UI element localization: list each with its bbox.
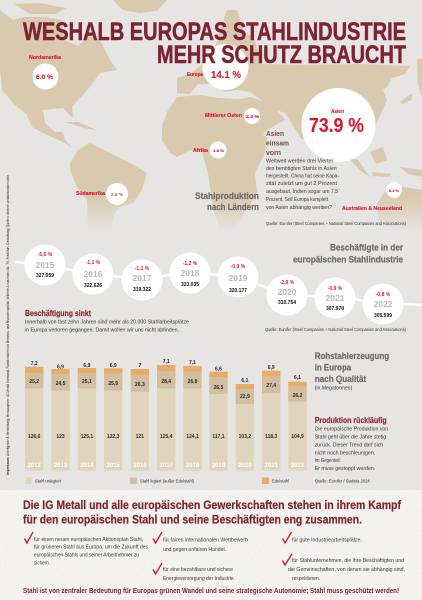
node 2017: -1,1 % bbox=[135, 266, 150, 272]
demand: Stahlunternehmen bbox=[282, 554, 405, 582]
node 2019: -0,9 % bbox=[231, 264, 246, 270]
world map bbox=[0, 0, 422, 232]
bar 2013 bbox=[51, 364, 70, 471]
demand: Wettbewerb: und gegen unfairen Handel. bbox=[163, 547, 226, 553]
text block: Asien einsam vorn: Prozent. Soll Europa komplett bbox=[266, 197, 328, 203]
bar 2014: 2014 bbox=[80, 463, 94, 469]
bar 2012: 126,6 bbox=[28, 434, 41, 440]
demand: Stahlunternehmen: für Stahlunternehmen, die ihre Beschäftigten und bbox=[292, 558, 404, 564]
heading: Beschäftigte: europäischen Stahlindustrie bbox=[293, 255, 403, 265]
node 2021: 2021 bbox=[326, 293, 345, 303]
node 2015 bbox=[24, 244, 66, 286]
bar 2013: 6,9 bbox=[57, 364, 64, 370]
node 2022: 2022 bbox=[374, 299, 393, 309]
panel heading bbox=[23, 498, 402, 526]
text block: Asien einsam vorn: des benötigten Stahls in Asien bbox=[266, 166, 337, 172]
bar 2018: 2018 bbox=[186, 463, 200, 469]
bar 2021: 6,9 bbox=[268, 365, 275, 371]
text block: Produktion rückläufig: Die europäische Produktion von bbox=[315, 426, 388, 432]
demand: Aktionsplan: sichern. bbox=[34, 560, 50, 566]
region: Asien bbox=[302, 88, 376, 162]
chart legend: Quelle: Eurofer / Statista 2024 bbox=[315, 478, 370, 484]
bar 2019: 6,6 bbox=[215, 367, 222, 373]
bar 2014: 25,1 bbox=[82, 379, 92, 385]
bar 2021: 27,4 bbox=[266, 383, 276, 389]
bar 2018: 26,8 bbox=[188, 379, 198, 385]
chart legend: Stahl legiert (außer Edelstahl) bbox=[140, 478, 194, 484]
employment timeline line bbox=[15, 262, 422, 305]
demand: Energieversorgung: Energieversorgung der Industrie. bbox=[163, 576, 235, 582]
text block: Beschäftigung sinkt bbox=[25, 309, 189, 334]
node 2018 bbox=[170, 252, 210, 294]
region: Mittlerer Osten: 2.4 % bbox=[246, 114, 259, 119]
text block: Produktion rückläufig: zurück. Dieser Trend darf sich bbox=[315, 443, 383, 449]
title bbox=[23, 18, 406, 69]
bar 2020: 22,9 bbox=[240, 394, 250, 400]
bar 2015: 6,9 bbox=[110, 363, 117, 369]
node 2020: 2020 bbox=[278, 287, 297, 297]
text block: Produktion rückläufig: Er muss gestoppt werden. bbox=[315, 466, 376, 472]
bar 2019 bbox=[209, 367, 228, 471]
bar 2019: 26,5 bbox=[214, 385, 224, 391]
bar 2015 bbox=[104, 363, 122, 471]
region: Südamerika: 2.5 % bbox=[111, 192, 124, 198]
region: Europa labels bbox=[187, 69, 242, 81]
node 2019: 2019 bbox=[229, 273, 248, 283]
bar 2014 bbox=[78, 363, 96, 471]
node 2016: 322.626 bbox=[84, 283, 102, 289]
bar 2020: 6,1 bbox=[241, 378, 249, 384]
region: Nordamerika: 6.0 % bbox=[36, 74, 53, 81]
bar 2016: 121 bbox=[136, 434, 144, 440]
bar 2013: 123 bbox=[56, 434, 65, 440]
bar 2015: 2015 bbox=[107, 463, 121, 469]
region: Afrika bbox=[193, 142, 226, 158]
demand: Industriearbeitsplätze: für gute Industriearbeitsplätze. bbox=[292, 538, 362, 544]
demand: Aktionsplan: für einen neuen europäischen Aktionsplan Stahl, bbox=[34, 537, 143, 543]
node 2016: 2016 bbox=[84, 269, 103, 279]
region: Australien und Neuseeland bbox=[342, 182, 402, 212]
bar 2017: 28,4 bbox=[161, 379, 171, 385]
bar 2013: 24,5 bbox=[56, 381, 66, 387]
node 2018: 323.035 bbox=[181, 282, 199, 288]
heading: Rohstahlerzeugung: (in Megatonnen) bbox=[315, 386, 352, 392]
bar 2016 bbox=[131, 363, 149, 471]
bar 2019: 2019 bbox=[212, 463, 226, 469]
text block: Asien einsam vorn: Asien bbox=[266, 129, 284, 138]
node 2021: 307.978 bbox=[326, 306, 344, 312]
text block: Asien einsam vorn: hergestellt. China hat seine Kapa- bbox=[266, 174, 339, 180]
bar 2021: 2021 bbox=[265, 463, 279, 469]
demand: Wettbewerb: für fairen internationalen Wettbewerb bbox=[163, 538, 248, 544]
region: Nordamerika: Nordamerika bbox=[29, 55, 61, 61]
heading: Rohstahlerzeugung bbox=[315, 351, 389, 392]
bar 2014: 6,9 bbox=[83, 363, 91, 369]
source: employment: Quelle: Eurofer (Steel Companies + National Steel Companies and Associations) bbox=[265, 327, 407, 332]
heading: Rohstahlerzeugung: in Europa bbox=[315, 363, 352, 373]
bar 2022: 104,9 bbox=[291, 434, 304, 440]
panel: demands bbox=[0, 490, 422, 600]
region: Südamerika bbox=[76, 183, 128, 205]
bar 2022: 26,2 bbox=[293, 393, 303, 399]
circle: Europa bbox=[202, 44, 248, 90]
bar 2018: 124,1 bbox=[186, 434, 199, 440]
demand: Industriearbeitsplätze bbox=[282, 532, 362, 544]
region: Nordamerika bbox=[29, 55, 61, 90]
text block: Produktion rückläufig bbox=[315, 416, 388, 472]
heading: Stahlproduktion nach Ländern: nach Ländern bbox=[207, 202, 259, 212]
node 2015: 2015 bbox=[36, 260, 55, 270]
region: Südamerika: Südamerika bbox=[76, 191, 105, 197]
heading: Rohstahlerzeugung: Rohstahlerzeugung bbox=[315, 351, 389, 361]
imprint: Impressum: Arbeitgeber & Herstellung: Herausgeber: IG Metall Vorstand, Funktionsbereich Betriebs- und Branchenpolitik, Wilhelm-Leuschner-Str. 79, Frankfurt, Gestaltung; Quellen: diverse produktionsberichte bbox=[6, 175, 10, 475]
bar 2017: 2017 bbox=[160, 463, 174, 469]
node 2020: -2,9 % bbox=[280, 280, 295, 286]
text block: Asien einsam vorn: ausgebaut, Indien sogar um 7,5 bbox=[266, 189, 338, 195]
stacked bar chart bbox=[25, 359, 307, 471]
node 2017: 319.322 bbox=[133, 287, 151, 293]
node 2016: -1,1 % bbox=[86, 260, 101, 266]
node 2022: -0,8 % bbox=[376, 292, 391, 298]
region: Australien und Neuseeland: 6.4 % bbox=[389, 188, 399, 193]
demand: Energieversorgung: für eine bezahlbare und sichere bbox=[163, 567, 233, 573]
text block: Produktion rückläufig: nicht noch beschleunigen. bbox=[315, 450, 376, 456]
panel heading: für den europäischen Stahl und seine Beschäftigten eng zusammen. bbox=[23, 512, 362, 526]
node 2016 bbox=[72, 254, 114, 294]
bar 2019: 117,1 bbox=[212, 434, 225, 440]
region: Australien und Neuseeland: Australien & Neuseeland bbox=[342, 206, 402, 212]
node 2015: -5,6 % bbox=[38, 252, 53, 258]
heading: Beschäftigte: Beschäftigte in der bbox=[330, 243, 403, 253]
bar 2015: 122,3 bbox=[107, 434, 120, 440]
text block: Beschäftigung sinkt: Beschäftigung sinkt bbox=[25, 309, 91, 318]
region: Europa labels: 14.1 % bbox=[211, 69, 242, 81]
bar 2016: 26,3 bbox=[135, 382, 145, 388]
bar 2013: 2013 bbox=[54, 463, 68, 469]
bar 2012: 7,2 bbox=[31, 361, 38, 367]
text block: Asien einsam vorn bbox=[266, 129, 339, 211]
node 2022 bbox=[362, 284, 404, 324]
node 2020: 310.754 bbox=[278, 300, 296, 306]
node 2021 bbox=[314, 278, 356, 318]
region: Mittlerer Osten: Mittlerer Osten bbox=[205, 113, 242, 119]
bar 2022: 6,1 bbox=[294, 375, 301, 381]
text block: Asien einsam vorn: einsam bbox=[266, 138, 289, 148]
node 2021: -0,9 % bbox=[328, 286, 343, 292]
chart legend bbox=[26, 478, 370, 484]
text block: Beschäftigung sinkt: in Europa verloren gegangen. Damit wollen wir uns nicht abfinden. bbox=[25, 328, 179, 334]
demand: Aktionsplan: für grüneren Stahl aus Europa, um die Zukunft des bbox=[34, 544, 148, 550]
text block: Asien einsam vorn: zität zuletzt um gut 2 Prozent bbox=[266, 181, 337, 187]
bar 2017: 7,1 bbox=[163, 359, 170, 365]
node 2019 bbox=[218, 256, 258, 298]
heading: Rohstahlerzeugung: nach Qualität bbox=[315, 374, 366, 384]
region: Asien: Asien bbox=[331, 109, 344, 115]
region: Mittlerer Osten bbox=[205, 108, 260, 124]
bar 2021: 118,3 bbox=[265, 434, 278, 440]
heading: Stahlproduktion nach Ländern: Stahlproduktion bbox=[195, 191, 259, 201]
node 2017 bbox=[122, 260, 162, 300]
demand: Aktionsplan bbox=[24, 532, 148, 566]
node 2019: 320.177 bbox=[229, 288, 247, 294]
bar 2012: 2012 bbox=[28, 463, 42, 469]
demand: Stahlunternehmen: die Gemeinschaften, von denen sie abhängig sind, bbox=[288, 567, 405, 573]
heading: Stahlproduktion nach Ländern bbox=[195, 191, 259, 212]
bar 2012: 25,2 bbox=[29, 379, 39, 385]
text block: Beschäftigung sinkt: Innerhalb von fast zehn Jahren sind mehr als 20.000 Stahlarbeitsplätze bbox=[25, 320, 189, 326]
bar 2020 bbox=[236, 378, 254, 471]
text block: Asien einsam vorn: von Asien abhängig werden? bbox=[266, 205, 332, 211]
text block: Asien einsam vorn: vorn bbox=[266, 148, 281, 157]
bar 2020: 2020 bbox=[238, 463, 252, 469]
region: Europa labels: Europa bbox=[187, 72, 203, 78]
bar 2018: 7,1 bbox=[189, 360, 196, 366]
bar 2022 bbox=[288, 375, 307, 471]
node 2020 bbox=[266, 274, 308, 316]
bar 2017 bbox=[157, 359, 175, 471]
node 2018: 2018 bbox=[181, 268, 200, 278]
node 2018: -1,2 % bbox=[183, 261, 198, 267]
node 2022: 305.599 bbox=[374, 313, 392, 319]
text block: Produktion rückläufig: Im Gegenteil: bbox=[315, 458, 341, 464]
text block: Asien einsam vorn: Weltweit werden drei Viertel bbox=[266, 159, 333, 165]
bar 2016: 7 bbox=[139, 363, 142, 369]
heading: Beschäftigte bbox=[293, 243, 403, 265]
source: map: Quelle: Eurofer (Steel Companies + National Steel Companies and Associations) bbox=[266, 221, 407, 226]
chart legend: Stahl unlegiert bbox=[35, 478, 62, 484]
node 2015: 327.059 bbox=[36, 273, 54, 279]
bar 2015: 25,9 bbox=[108, 381, 118, 387]
bar 2018 bbox=[183, 360, 202, 471]
text block: Produktion rückläufig: Stahl geht über die Jahre stetig bbox=[315, 434, 386, 440]
bar 2020: 103,2 bbox=[239, 434, 251, 440]
bar 2012 bbox=[25, 361, 43, 471]
region: Afrika: 1.8 % bbox=[213, 148, 224, 153]
text block: Produktion rückläufig: Produktion rückläufig bbox=[315, 416, 387, 425]
region: Afrika: Afrika bbox=[193, 148, 208, 154]
demand: Energieversorgung bbox=[153, 563, 235, 582]
chart legend: Edelstahl bbox=[272, 478, 289, 484]
bar 2017: 125,4 bbox=[160, 434, 173, 440]
bar 2021 bbox=[262, 365, 280, 471]
node 2017: 2017 bbox=[133, 273, 152, 283]
bar 2022: 2022 bbox=[291, 463, 305, 469]
demand: Stahlunternehmen: respektieren. bbox=[292, 576, 320, 582]
employment timeline bbox=[24, 244, 404, 324]
demand: Wettbewerb bbox=[153, 532, 248, 553]
demand: Aktionsplan: europäischen Stahls und seiner Arbeitnehmer zu bbox=[34, 553, 139, 559]
bar 2014: 125,1 bbox=[81, 434, 93, 440]
region: Asien: 73.9 % bbox=[309, 115, 364, 137]
bar 2016: 2016 bbox=[133, 463, 147, 469]
